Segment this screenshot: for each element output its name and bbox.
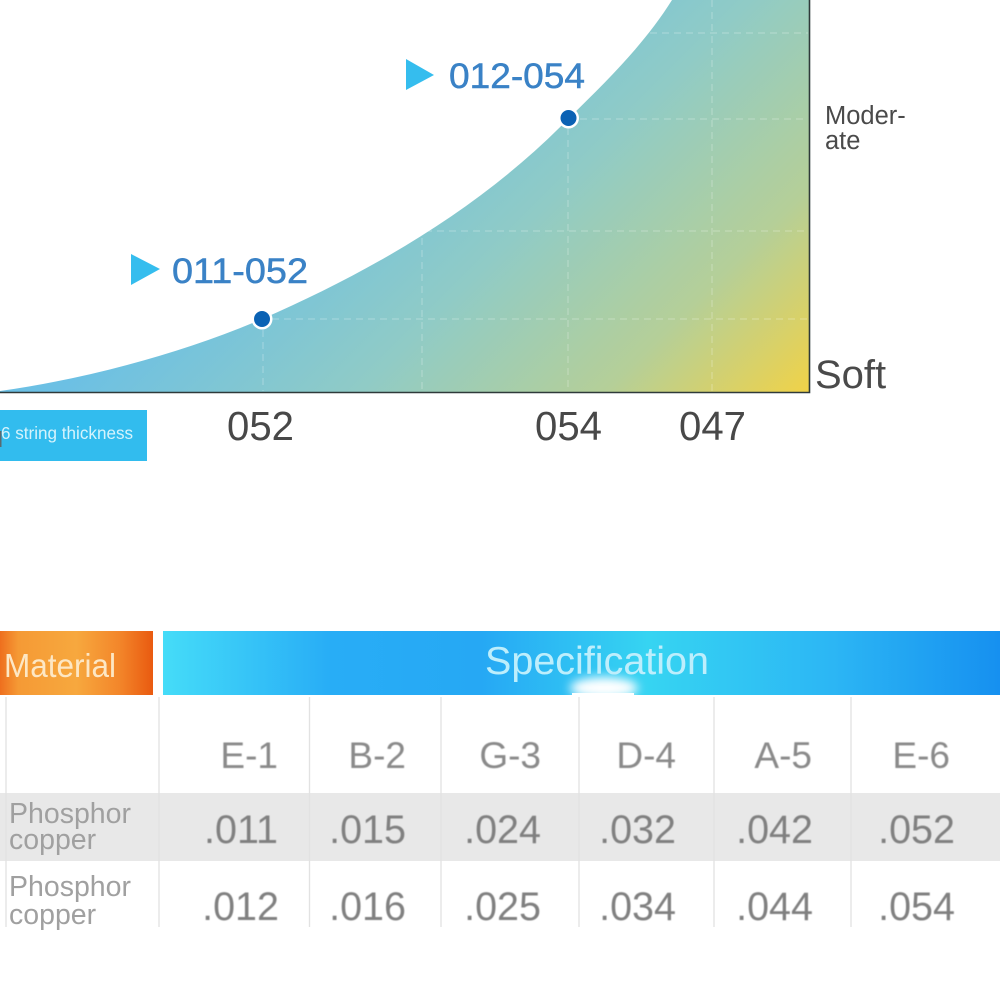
- point: 012-054: [558, 108, 579, 128]
- row label: phosphor copper 2: Phosphor: [9, 871, 131, 903]
- icon: triangle marker: [131, 254, 160, 285]
- point: 011-052: [252, 308, 272, 330]
- row values 1: .015: [329, 808, 406, 852]
- axis labels: 052: [227, 403, 294, 449]
- legend: string thickness: [0, 410, 147, 461]
- label: moderate: Moder-: [825, 102, 906, 130]
- row label: phosphor copper 1: copper: [9, 824, 97, 856]
- row values 2: .044: [736, 885, 813, 929]
- column dividers: [6, 697, 851, 927]
- row values 2: .016: [329, 885, 406, 929]
- column headings: E-6: [892, 735, 950, 776]
- row values 1: .042: [736, 808, 813, 852]
- chart axes: [0, 0, 810, 392]
- label: 012-054: 012-054: [449, 57, 585, 96]
- row values 1: .032: [599, 808, 676, 852]
- table header: material: [0, 631, 153, 695]
- axis labels: [227, 403, 746, 449]
- table header: specification: Specification: [485, 640, 709, 683]
- column headings: [220, 735, 950, 776]
- row values 1: .052: [878, 808, 955, 852]
- chart area fill: [0, 0, 809, 392]
- specification table: [0, 697, 1000, 931]
- row label: phosphor copper 1: Phosphor: [9, 798, 131, 830]
- column headings: G-3: [479, 735, 541, 776]
- label: soft: Soft: [815, 353, 886, 397]
- axis labels: 054: [535, 403, 602, 449]
- chart: string tension curve: [0, 0, 810, 392]
- row values 2: .034: [599, 885, 676, 929]
- row values 2: .012: [202, 885, 279, 929]
- row label: phosphor copper 2: copper: [9, 899, 97, 931]
- highlight smudge: [570, 677, 638, 699]
- row values 1: .011: [204, 808, 278, 852]
- table header: material: Material: [4, 647, 116, 684]
- label: moderate: ate: [825, 127, 860, 155]
- label: 011-052: 011-052: [172, 252, 308, 291]
- row values 2: .054: [878, 885, 955, 929]
- axis labels: 047: [679, 403, 746, 449]
- row values 1: [204, 808, 955, 852]
- row values 2: [202, 885, 955, 929]
- row band: first phosphor copper: [0, 793, 1000, 861]
- chart grid lines: [263, 0, 808, 391]
- column headings: B-2: [348, 735, 406, 776]
- column headings: D-4: [616, 735, 676, 776]
- table header: specification: [163, 631, 1000, 699]
- column headings: E-1: [220, 735, 278, 776]
- column headings: A-5: [754, 735, 812, 776]
- row values 1: .024: [464, 808, 541, 852]
- row values 2: .025: [464, 885, 541, 929]
- icon: triangle marker: [406, 59, 434, 90]
- legend: string thickness: 6 string thickness: [1, 424, 133, 443]
